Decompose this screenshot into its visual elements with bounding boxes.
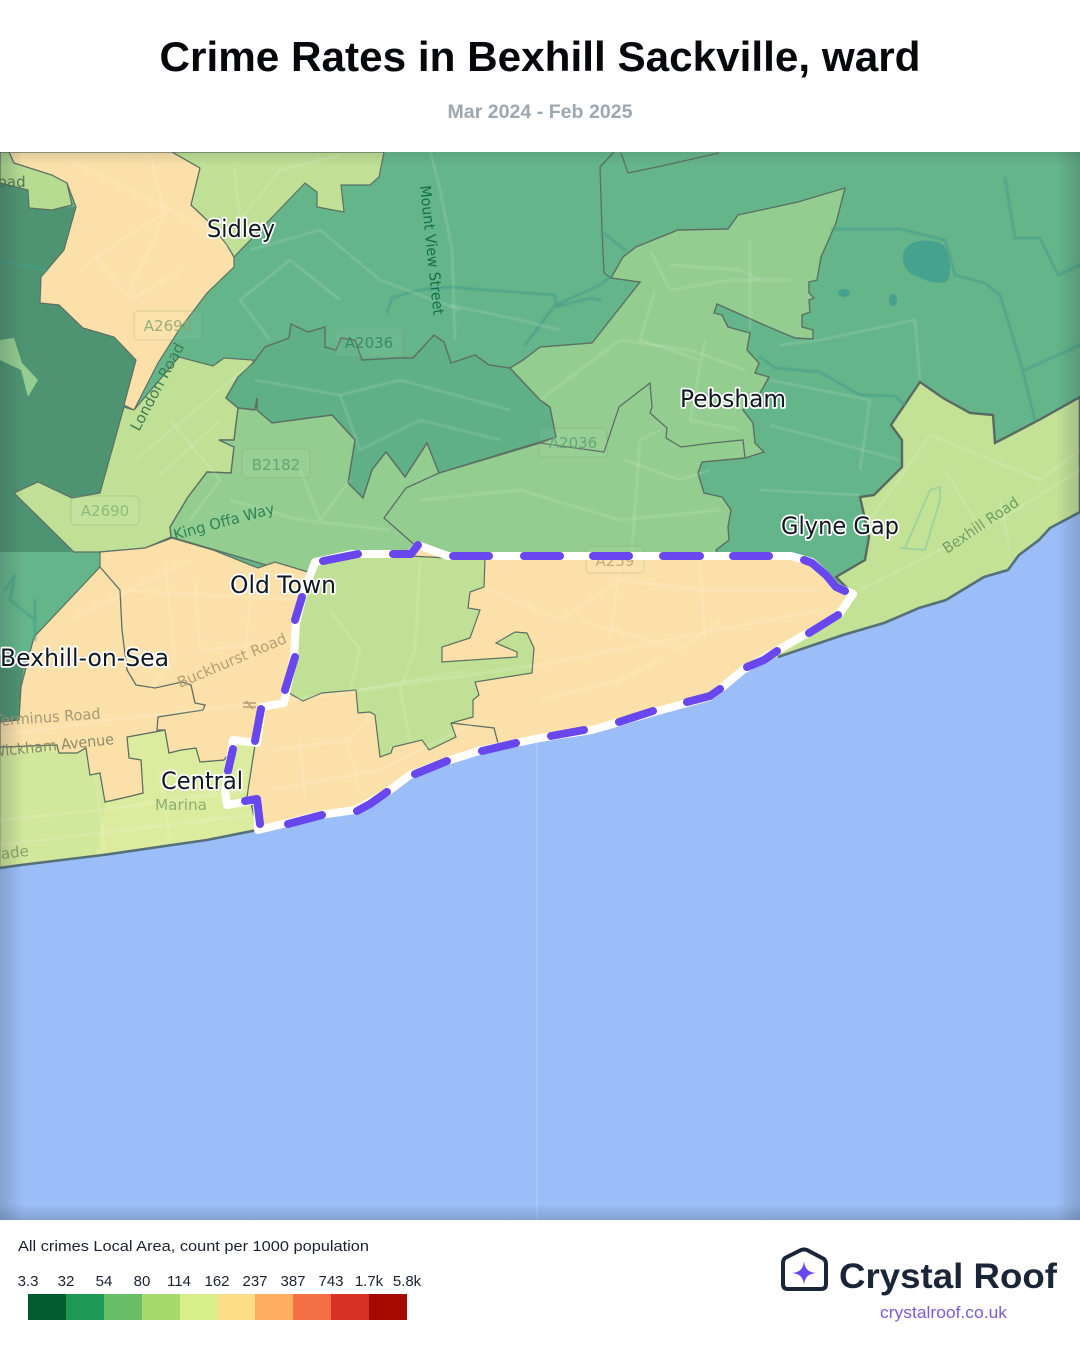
area: light patch in west [0,338,38,397]
road network [0,150,1080,850]
boundary lines between areas [100,152,745,798]
place label: Central: Central [161,767,243,795]
faint sea tile seam [536,742,538,1220]
legend tick labels: 387 [280,1273,306,1290]
ward area: yellow-green interior [289,556,534,757]
legend tick labels [18,1273,422,1290]
road shields [71,311,644,573]
place label: Bexhill-on-Sea: Bexhill-on-Sea [0,644,169,672]
area: yellow-green Sidley [172,152,384,257]
coastline east [778,512,1080,657]
railway station icon [243,701,256,709]
area: light green King Offa Way and Pebsham [170,188,845,575]
area: tan Old Town [0,538,315,802]
legend tick labels: 80 [134,1273,150,1290]
road labels: Buckhurst Road [175,629,289,692]
ward area: tan fill [225,545,853,830]
land base: mid green areas [0,152,1080,812]
legend tick labels: 1.7k [355,1273,384,1290]
legend title: All crimes Local Area, count per 1000 population [18,1238,369,1255]
area: A2036 darker green [226,324,556,498]
ward boundary: white outline [225,545,853,830]
road labels: King Offa Way [171,500,277,544]
wordmark: Crystal Roof [839,1257,1057,1296]
icon: house with star [783,1250,826,1289]
logo: Crystal Roof [783,1250,1057,1322]
title: Crime Rates in Bexhill Sackville, ward [160,33,920,80]
green field detail [900,487,940,550]
website: crystalroof.co.uk [880,1304,1008,1322]
place label: Sidley: Sidley [207,215,275,243]
legend tick labels: 237 [242,1273,268,1290]
road labels: London Road [127,340,188,434]
road labels: A2036 [549,434,597,452]
legend tick labels: 54 [96,1273,112,1290]
subtitle: date range: Mar 2024 - Feb 2025 [448,102,633,123]
road labels: A259 [596,552,634,570]
area: tan north-west by Sidley [9,152,234,410]
area: dark green west [0,183,136,552]
place label: Glyne Gap: Glyne Gap [781,512,899,540]
area: London Road yellow-green [14,357,253,552]
legend tick labels: 3.3 [18,1273,38,1290]
area: yellow-green east [772,380,1080,660]
area: greener Central west [0,752,105,868]
road labels: A2690 [144,317,192,335]
legend tick labels: 162 [204,1273,230,1290]
road labels: A2690 [81,502,129,520]
place label: Old Town: Old Town [230,571,336,599]
edge shading [0,152,1080,1220]
road labels: B2182 [252,456,300,474]
road labels [0,173,1022,866]
map panel [0,150,1080,1220]
pond [903,241,950,283]
ward area: pale corner in Central [229,744,256,800]
legend tick labels: 114 [167,1273,191,1290]
sea [0,512,1080,1220]
area: light green top-left [0,152,72,210]
area: dark green west lower [0,655,24,722]
legend [18,1238,422,1320]
coastline west [0,830,257,868]
water channels [0,178,1080,640]
road labels: Marina [155,796,207,814]
legend tick labels: 32 [58,1273,74,1290]
area: pale green Central [0,730,254,866]
legend colour scale [28,1294,407,1320]
road labels: Bexhill Road [939,493,1022,557]
legend tick labels: 743 [318,1273,344,1290]
road labels: A2036 [345,334,393,352]
place label: Pebsham: Pebsham [680,385,786,413]
legend tick labels: 5.8k [393,1273,422,1290]
ward boundary: purple dashes [228,545,845,824]
small ponds [838,289,897,306]
road labels: Mount View Street [416,185,448,316]
